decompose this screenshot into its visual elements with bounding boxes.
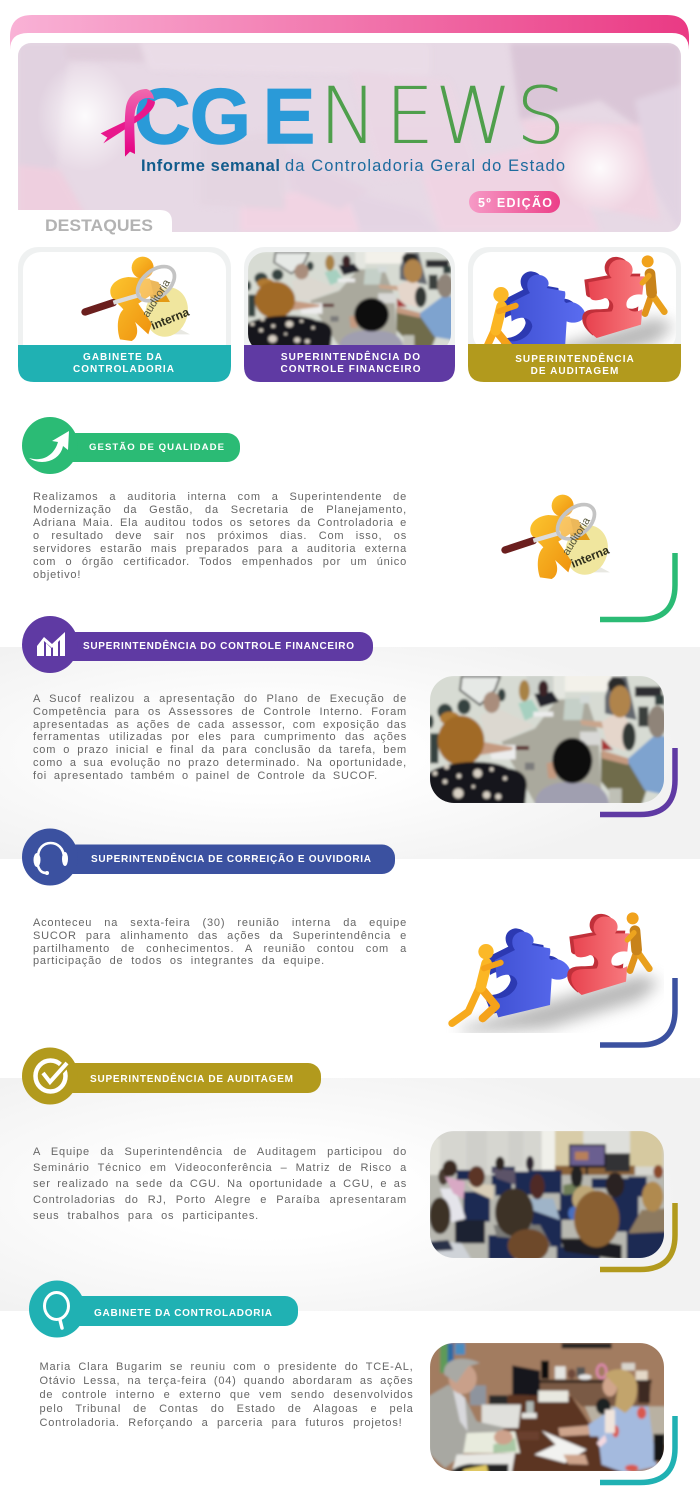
destaques tab: DESTAQUES (45, 216, 153, 235)
text block: gabinete da controladoria: Otávio Lessa, na terça-feira (04) quando abordaram as ações (40, 1375, 414, 1387)
icon: pink ribbon (101, 89, 155, 157)
corner accent: purple (600, 748, 675, 814)
text block: controle financeiro: foi apresentado também o painel de Controle da SUCOF. (33, 770, 378, 782)
text block: controle financeiro (33, 693, 407, 782)
text block: gestão de qualidade: objetivo! (33, 569, 81, 581)
highlight card: gabinete da controladoria: GABINETE DA (83, 352, 163, 363)
text block: correição e ouvidoria: SUCOR para alinhamento das ações da Superintendência e (33, 930, 407, 942)
text block: gestão de qualidade: servidores estarão mais preparados para a auditoria externa (33, 543, 407, 555)
highlight card: gabinete da controladoria (18, 247, 231, 382)
icon: magnifier (44, 1292, 68, 1328)
top pink header bar (10, 15, 689, 50)
highlight card: superintendência do controle financeiro (244, 247, 455, 382)
text block: controle financeiro: apresentadas as ações de cada assessor, com exposição das (33, 719, 407, 731)
section heading: auditagem: SUPERINTENDÊNCIA DE AUDITAGEM (90, 1072, 293, 1085)
illustration: auditoria interna: interna (569, 543, 612, 571)
section heading: correição e ouvidoria: SUPERINTENDÊNCIA DE CORREIÇÃO E OUVIDORIA (91, 852, 371, 865)
text block: correição e ouvidoria: partilhamento de conhecimentos. A reunião contou com a (33, 943, 407, 955)
gray background band: controle financeiro (0, 647, 700, 859)
text block: gestão de qualidade: com o órgão certificador. Todos empenhados por um único (33, 556, 407, 568)
text block: gabinete da controladoria: Maria Clara Bugarim se reuniu com o presidente do TCE-AL, (40, 1361, 414, 1373)
corner accent: blue (600, 978, 675, 1045)
photo: videoconference (428, 1130, 667, 1262)
highlight card: superintendência de auditagem: DE AUDITAGEM (531, 366, 619, 377)
logo CGE NEWS: NEWS (319, 72, 566, 162)
section heading: gestão de qualidade (22, 417, 240, 474)
section heading: gestão de qualidade: GESTÃO DE QUALIDADE (89, 442, 225, 453)
icon: headset (38, 843, 64, 873)
icon: check circle (36, 1060, 68, 1092)
illustration: auditoria interna: auditoria (140, 277, 173, 320)
highlight card: superintendência do controle financeiro: CONTROLE FINANCEIRO (280, 364, 422, 375)
destaques tab (18, 210, 180, 236)
edition badge: 5º EDIÇÃO (478, 195, 552, 210)
highlight card: superintendência de auditagem: SUPERINTENDÊNCIA (515, 352, 635, 365)
icon: curved arrow (29, 431, 69, 462)
photo: office meeting (428, 1341, 667, 1473)
logo CGE NEWS: CGE (134, 72, 315, 160)
text block: auditagem: Seminário Técnico em Videoconferência – Matriz de Risco a (33, 1162, 407, 1174)
text block: auditagem: seus trabalhos para os participantes. (33, 1210, 259, 1222)
illustration: auditoria interna (85, 257, 193, 342)
illustration: auditoria interna: auditoria (560, 515, 593, 558)
corner accent: teal (600, 1416, 675, 1482)
corner accent: olive (600, 1203, 675, 1270)
subtitle: Informe semanal (141, 157, 280, 175)
text block: auditagem (33, 1146, 407, 1222)
illustration: puzzle pieces (452, 912, 660, 1033)
text block: controle financeiro: A Sucof realizou a apresentação do Plano de Execução de (33, 693, 407, 705)
text block: gabinete da controladoria: pelo Tribunal de Contas do Estado de Alagoas e pela (40, 1403, 414, 1415)
text block: controle financeiro: como a sua evolução no prazo determinado. Na oportunidade, (33, 757, 407, 769)
text block: auditagem: ser realizado na sede da CGU. Na oportunidade a CGU, e as (33, 1178, 407, 1190)
text block: auditagem: A Equipe da Superintendência de Auditagem participou do (33, 1146, 407, 1158)
text block: gestão de qualidade: Modernização da Gestão, da Secretaria de Planejamento, (33, 504, 407, 516)
text block: correição e ouvidoria: Aconteceu na sexta-feira (30) reunião interna da equipe (33, 917, 407, 929)
highlight card: gabinete da controladoria: CONTROLADORIA (73, 364, 175, 375)
text block: gabinete da controladoria: de controle interno e externo que vem sendo desenvolvidos (40, 1389, 414, 1401)
section heading: gabinete da controladoria: GABINETE DA CONTROLADORIA (94, 1308, 272, 1319)
section heading: auditagem (22, 1048, 321, 1104)
photo: meeting (428, 675, 667, 805)
text block: controle financeiro: Competência para os Assessores de Controle Interno. Foram (33, 706, 407, 718)
section heading: controle financeiro: SUPERINTENDÊNCIA DO CONTROLE FINANCEIRO (83, 639, 354, 652)
text block: controle financeiro: ferramentas utilizadas por eles para cumprimento das ações (33, 731, 407, 743)
text block: gestão de qualidade: Realizamos a auditoria interna com a Superintendente de (33, 491, 407, 503)
text block: gestão de qualidade (33, 491, 407, 581)
section heading: gabinete da controladoria (29, 1280, 298, 1338)
illustration: auditoria interna: interna (149, 305, 192, 333)
highlight card: superintendência de auditagem (467, 247, 681, 382)
text block: gabinete da controladoria (40, 1361, 414, 1429)
text block: correição e ouvidoria (33, 917, 407, 967)
text block: gabinete da controladoria: Controladoria. Reforçando a parceria para futuros projetos! (40, 1417, 402, 1429)
illustration: auditoria interna (505, 495, 613, 580)
corner accent: green (600, 553, 675, 620)
highlight card: superintendência do controle financeiro: SUPERINTENDÊNCIA DO (281, 350, 421, 363)
logo CGE NEWS (134, 72, 566, 162)
edition badge (469, 191, 560, 213)
text block: gestão de qualidade: o resultado deve sair nos próximos dias. Com isso, os (33, 530, 407, 542)
header banner (18, 43, 681, 236)
text block: correição e ouvidoria: participação de todos os integrantes da equipe. (33, 955, 325, 967)
icon: bar chart with trend (37, 632, 65, 656)
subtitle: da Controladoria Geral do Estado (285, 157, 565, 175)
text block: gestão de qualidade: Adriana Maia. Ela auditou todos os setores da Controladoria e (33, 517, 407, 529)
text block: auditagem: Controladorias do RJ, Porto Alegre e Paraíba apresentaram (33, 1194, 407, 1206)
text block: controle financeiro: com o prazo inicial e final da para conclusão da tarefa, bem (33, 744, 407, 756)
section heading: controle financeiro (22, 616, 373, 673)
gray background band: auditagem (0, 1078, 700, 1311)
section heading: correição e ouvidoria (22, 828, 395, 886)
